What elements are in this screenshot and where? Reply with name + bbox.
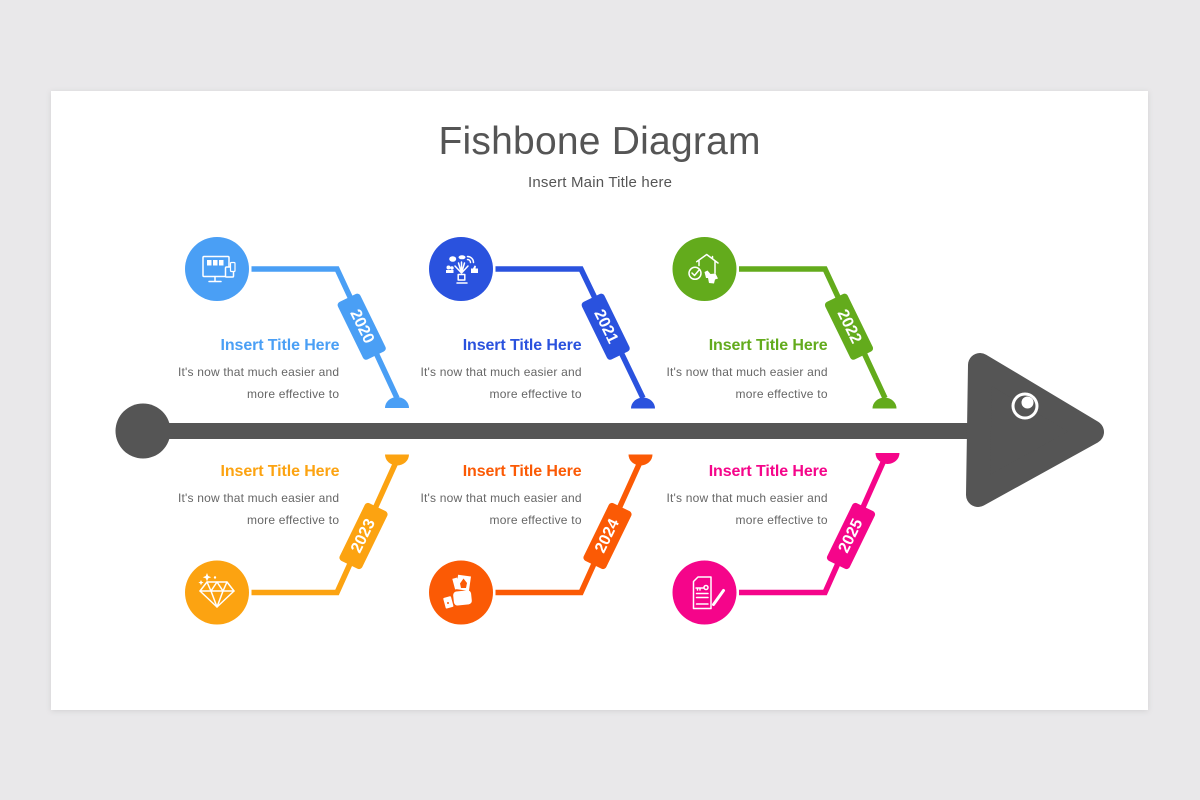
foot (385, 454, 409, 466)
branch text: more effective to (490, 387, 582, 401)
year badge: 2020 (346, 307, 377, 347)
branch text: Insert Title Here (709, 463, 828, 480)
node circle (185, 237, 249, 301)
foot (872, 398, 896, 408)
year badge (336, 292, 387, 361)
branch: 2022 (666, 237, 896, 408)
branch: 2020 (178, 237, 409, 408)
branch text: Insert Title Here (220, 463, 340, 480)
branch text: more effective to (736, 513, 828, 527)
year badge: 2025 (836, 516, 866, 556)
icon: money in hand (443, 575, 472, 609)
foot (385, 397, 409, 408)
branch text: more effective to (736, 387, 828, 401)
branch text (420, 337, 582, 401)
foot (876, 453, 900, 464)
branch text: It's now that much easier and (178, 365, 339, 379)
foot (628, 454, 652, 466)
branch text (666, 337, 828, 401)
branch text: Insert Title Here (709, 337, 828, 354)
year badge (582, 502, 633, 570)
year badge: 2024 (592, 516, 623, 556)
branch text: Insert Title Here (463, 337, 582, 354)
branch: 2025 (666, 453, 900, 624)
icon: devices (203, 256, 235, 282)
node circle (429, 237, 493, 301)
white slide panel (51, 91, 1148, 710)
branch text: Insert Title Here (220, 337, 340, 354)
node circle (672, 560, 736, 624)
branch text: more effective to (247, 513, 339, 527)
branch: 2021 (420, 237, 655, 408)
year badge (826, 502, 876, 570)
title: Fishbone Diagram (438, 120, 760, 163)
branch text: Insert Title Here (463, 463, 582, 480)
year badge: 2023 (348, 516, 379, 556)
branch: 2024 (420, 454, 652, 624)
branch text: more effective to (247, 387, 339, 401)
branch text: It's now that much easier and (420, 365, 582, 379)
branch text: It's now that much easier and (178, 491, 339, 505)
branch text (666, 463, 828, 527)
icon: signed document (694, 577, 724, 608)
branch text: It's now that much easier and (666, 365, 828, 379)
year badge: 2021 (590, 307, 621, 347)
node circle (672, 237, 736, 301)
branch: 2023 (178, 454, 409, 624)
branch text (178, 463, 340, 527)
icon: social network (446, 255, 478, 283)
branch text: It's now that much easier and (666, 491, 828, 505)
fish head (978, 365, 1092, 495)
branch text (178, 337, 340, 401)
node circle (429, 560, 493, 624)
icon: diamond (198, 573, 234, 607)
subtitle: Insert Main Title here (528, 174, 672, 191)
year badge (338, 502, 389, 570)
year badge (824, 292, 874, 361)
branch text: It's now that much easier and (420, 491, 582, 505)
branch text: more effective to (490, 513, 582, 527)
year badge (580, 292, 631, 361)
fish skeleton: tail and spine (116, 404, 973, 458)
node circle (185, 560, 249, 624)
year badge: 2022 (834, 307, 864, 347)
icon: house and hammer (689, 254, 718, 284)
foot (631, 398, 655, 408)
branch text (420, 463, 582, 527)
